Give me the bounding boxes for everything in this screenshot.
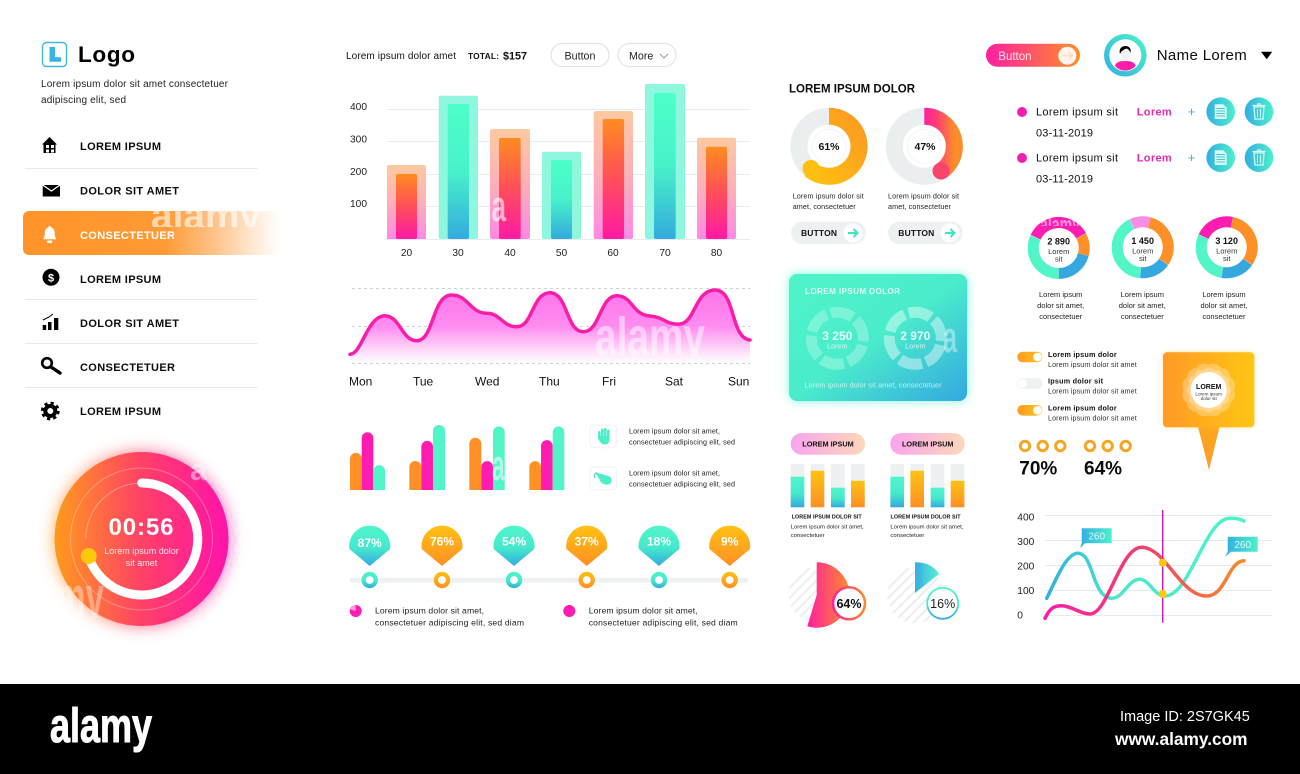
icon: trash: [1245, 143, 1273, 172]
panel: sidebar menu: CONSECTETUER: [80, 230, 175, 242]
bar chart: 80: [711, 248, 722, 259]
stat 64%: [1084, 441, 1130, 480]
panel: gradient card: Lorem ipsum dolor sit amet, consectetuer: [804, 380, 942, 390]
panel: countdown timer: sit amet: [126, 558, 158, 568]
segmented donut 1 450: Lorem: [1132, 246, 1153, 256]
segmented donut 1 450: sit: [1139, 254, 1147, 263]
donut 47%: 47%: [914, 141, 936, 153]
donut captions: consectetuer: [1039, 312, 1083, 321]
donut captions: Lorem ipsum: [1121, 290, 1164, 299]
footer bar: [0, 684, 1300, 774]
callout pin card: dolor sit: [1201, 396, 1217, 401]
progress ring: [88, 483, 198, 595]
icon: growth chart: [43, 314, 58, 330]
area chart: Wed: [475, 374, 499, 388]
donut captions: amet, consectetuer: [888, 202, 952, 211]
toggles: Lorem ipsum dolor sit amet: [1048, 386, 1137, 396]
alamy logo: alamy: [50, 700, 152, 753]
segmented donut 2 890: alamy: [1040, 212, 1080, 237]
panel: sidebar menu: DOLOR SIT AMET: [80, 186, 179, 198]
gesture legend: Lorem ipsum dolor sit amet,: [629, 426, 720, 436]
highlighted menu row: [23, 211, 280, 255]
gesture legend: consectetuer adipiscing elit, sed: [629, 438, 735, 446]
pin 76%: 76%: [430, 534, 454, 548]
segmented donut 3 120: Lorem: [1216, 246, 1237, 256]
timeline legend: consectetuer adipiscing elit, sed diam: [589, 618, 738, 628]
logo: Logo: [78, 42, 135, 67]
stat 70%: 70%: [1019, 458, 1057, 480]
button right: BUTTON: [898, 228, 934, 238]
segmented donut 2 890: 2 890: [1047, 236, 1070, 246]
flower badge: [1179, 360, 1238, 420]
ring 2 970: 2 970: [900, 329, 931, 343]
donut captions: [793, 192, 959, 211]
panel: mini bar card left: [791, 433, 865, 539]
top toolbar: Lorem ipsum dolor amet: [346, 51, 456, 62]
panel: mini bar card left: LOREM IPSUM DOLOR SIT: [792, 515, 862, 521]
toggle on: [1017, 352, 1042, 362]
pin 87%: 87%: [358, 536, 382, 550]
watermark on menu: alamy: [151, 194, 262, 238]
ring 3 250: [805, 306, 869, 370]
segmented donut 3 120: 3 120: [1215, 236, 1238, 246]
pin 18%: [638, 526, 679, 588]
donut 47%: [894, 116, 954, 180]
watermark on area chart: alamy: [595, 307, 705, 367]
timeline legend: Lorem ipsum dolor sit amet,: [589, 606, 698, 616]
row 2: Lorem ipsum sit: [1036, 152, 1118, 164]
pin 54%: 54%: [502, 534, 526, 548]
callout 260: 260: [1234, 540, 1251, 551]
callout pin card: Lorem ipsum: [1195, 392, 1222, 396]
donut captions: consectetuer: [1203, 312, 1246, 321]
bars: [387, 84, 736, 239]
watermark on timer top: a: [190, 454, 207, 487]
area chart: Tue: [413, 374, 434, 388]
panel: mini bar card left: Lorem ipsum dolor sit amet,: [791, 524, 864, 530]
segmented donut 1 450: [1107, 212, 1178, 283]
donut captions: Lorem ipsum dolor sit: [793, 192, 864, 200]
bar chart: 400: [350, 102, 367, 113]
pin 54%: [494, 526, 534, 588]
area chart: Fri: [602, 374, 616, 388]
pin 76%: [422, 526, 462, 588]
list rows: [1017, 97, 1273, 186]
donut captions: Lorem ipsum dolor sit: [888, 192, 959, 200]
ring 3 250: Lorem: [827, 342, 847, 350]
callout pin card: LOREM: [1196, 384, 1222, 391]
icon: gear: [42, 403, 58, 419]
donut 61%: 61%: [818, 141, 840, 153]
area chart: [349, 288, 750, 388]
row 1: +: [1188, 104, 1195, 119]
area chart: Thu: [539, 374, 560, 388]
segmented donut 2 890: sit: [1055, 254, 1063, 264]
panel: sidebar menu: LOREM IPSUM: [80, 406, 161, 418]
ring 2 970: Lorem: [905, 342, 925, 350]
icon: document: [1206, 143, 1235, 172]
icon: mail: [43, 185, 60, 196]
line chart: 300: [1017, 537, 1035, 548]
pin 18%: 18%: [647, 534, 671, 548]
stat 70%: [1019, 441, 1065, 480]
panel: mini bar card right: consectetuer: [890, 533, 924, 539]
pin 9%: 9%: [721, 534, 739, 548]
icon: document: [1206, 97, 1235, 126]
bar chart: 20: [401, 248, 412, 259]
panel: mini bar card left: LOREM IPSUM: [802, 440, 854, 449]
line chart: 0: [1017, 610, 1023, 622]
row 2: Lorem: [1137, 152, 1172, 164]
timeline legend: consectetuer adipiscing elit, sed diam: [375, 618, 524, 628]
line chart: 200: [1017, 562, 1035, 572]
row 1: 03-11-2019: [1036, 128, 1093, 140]
donut captions: [1037, 290, 1248, 321]
more button: [618, 44, 676, 66]
intro text: adipiscing elit, sed: [41, 95, 126, 106]
bar chart: 300: [350, 134, 367, 146]
area chart: Mon: [349, 374, 372, 388]
bar chart: 50: [556, 248, 567, 259]
bar chart: [350, 84, 750, 259]
segmented donut 2 890: [1028, 216, 1090, 279]
segmented donut 1 450: 1 450: [1131, 236, 1154, 246]
button left: BUTTON: [801, 228, 837, 238]
donut 61%: [799, 116, 859, 177]
donut captions: amet, consectetuer: [793, 202, 856, 211]
icon: pointing hand: [590, 467, 617, 490]
button right: [888, 222, 963, 244]
callout 260: [1080, 528, 1112, 548]
intro text: [41, 79, 229, 106]
pie 16%: [887, 562, 958, 623]
gesture legend: Lorem ipsum dolor sit amet,: [629, 469, 720, 478]
button: [551, 44, 609, 66]
callout 260: 260: [1088, 532, 1105, 542]
area chart: Sun: [728, 374, 749, 388]
bar chart: 40: [504, 248, 516, 259]
pin 37%: 37%: [575, 534, 599, 548]
panel: sidebar menu: LOREM IPSUM: [80, 274, 161, 286]
more button: More: [629, 50, 653, 62]
pie 64%: [789, 562, 865, 628]
icon: bell: [43, 226, 56, 243]
button left: [791, 222, 866, 244]
panel: gradient card: [789, 274, 967, 401]
segmented donut 3 120: sit: [1223, 254, 1231, 263]
panel: sidebar menu: [23, 137, 280, 419]
bar chart: 30: [452, 248, 464, 259]
row 2: 03-11-2019: [1036, 174, 1093, 186]
panel: sidebar menu: DOLOR SIT AMET: [80, 318, 179, 330]
row 1: Lorem: [1137, 106, 1172, 118]
area chart: Sat: [665, 374, 684, 388]
top toolbar: $157: [503, 50, 527, 62]
ring 3 250: 3 250: [822, 329, 853, 343]
pin 87%: [349, 526, 390, 588]
row 1: [1017, 97, 1273, 140]
panel: mini bar card left: consectetuer: [791, 533, 825, 539]
gesture legend: consectetuer adipiscing elit, sed: [629, 480, 735, 489]
footer bar: Image ID: 2S7GK45: [1120, 709, 1250, 725]
stat 64%: 64%: [1084, 458, 1122, 480]
gradient button: [986, 44, 1080, 67]
toggle off: [1017, 378, 1042, 389]
ring 2 970: [883, 306, 947, 370]
logo: [42, 42, 135, 67]
row 2: +: [1188, 150, 1195, 165]
icon: logo L: [42, 42, 66, 66]
watermark on card: a: [943, 313, 957, 362]
top toolbar: TOTAL:: [468, 51, 499, 61]
callout 260: [1225, 537, 1258, 557]
segmented donut 3 120: [1191, 212, 1262, 283]
bar chart: 60: [607, 248, 619, 259]
donut captions: Lorem ipsum: [1202, 290, 1246, 299]
timeline legend: [350, 605, 738, 628]
pin 9%: [709, 526, 750, 588]
pie 16%: 16%: [930, 597, 955, 611]
bar chart: 70: [659, 248, 671, 259]
icon: trash: [1245, 97, 1273, 126]
icon: search: [42, 358, 60, 373]
icon: dollar: $: [48, 272, 54, 284]
donut captions: dolor sit amet,: [1037, 301, 1084, 310]
icon: hand: [590, 425, 617, 448]
button: Button: [565, 50, 596, 62]
bar chart: 200: [350, 167, 367, 178]
toggles: Lorem ipsum dolor: [1048, 403, 1117, 412]
panel: mini bar card right: LOREM IPSUM DOLOR SIT: [890, 515, 961, 521]
line chart: 400: [1017, 512, 1035, 524]
watermark on grouped bars: a: [492, 441, 505, 490]
percent pin timeline: [349, 526, 750, 588]
row 2: [1017, 143, 1273, 186]
callout pin card: [1163, 352, 1254, 470]
panel: sidebar menu: CONSECTETUER: [80, 362, 175, 374]
watermark on timer: my: [56, 565, 104, 630]
icon: avatar: [1104, 34, 1147, 77]
icon: home: [42, 137, 57, 153]
toggles: Lorem ipsum dolor sit amet: [1048, 413, 1137, 422]
donut captions: Lorem ipsum: [1039, 290, 1082, 299]
top toolbar: [346, 44, 676, 66]
panel: gradient card: LOREM IPSUM DOLOR: [805, 287, 900, 296]
donut captions: dolor sit amet,: [1119, 301, 1166, 310]
bar chart: 100: [350, 199, 367, 210]
line chart: 100: [1017, 586, 1035, 597]
toggle on: [1017, 405, 1042, 416]
user profile: Name Lorem: [1157, 47, 1247, 64]
donut captions: dolor sit amet,: [1200, 301, 1248, 310]
toggles: [1017, 350, 1137, 422]
timeline legend: Lorem ipsum dolor sit amet,: [375, 606, 484, 616]
panel: mini bar card right: Lorem ipsum dolor sit amet,: [890, 524, 964, 530]
pin 37%: [566, 526, 607, 588]
toggles: Lorem ipsum dolor: [1048, 350, 1117, 359]
panel: countdown timer: Lorem ipsum dolor: [104, 546, 179, 556]
panel: mini bar card right: LOREM IPSUM: [902, 440, 953, 449]
icon: dropdown arrow: [1261, 52, 1272, 59]
watermark on bar: a: [492, 182, 506, 231]
segmented donut 2 890: Lorem: [1048, 247, 1069, 256]
panel: countdown timer: [54, 452, 228, 626]
panel: countdown timer: 00:56: [108, 514, 174, 541]
line chart: [1017, 510, 1273, 623]
gradient button: Button: [998, 51, 1032, 63]
grouped bars: [350, 425, 564, 490]
icon: dollar: [42, 269, 60, 286]
pie 64%: 64%: [836, 597, 862, 611]
heading: lorem ipsum dolor: LOREM IPSUM DOLOR: [789, 84, 916, 96]
panel: sidebar menu: LOREM IPSUM: [80, 141, 161, 153]
intro text: Lorem ipsum dolor sit amet consectetuer: [41, 79, 229, 90]
row 1: Lorem ipsum sit: [1036, 106, 1118, 118]
panel: mini bar card right: [890, 433, 965, 539]
footer bar: www.alamy.com: [1114, 729, 1248, 749]
toggles: Lorem ipsum dolor sit amet: [1048, 360, 1137, 369]
donut captions: consectetuer: [1121, 312, 1164, 321]
toggles: Ipsum dolor sit: [1048, 376, 1104, 386]
user profile: [1104, 34, 1272, 77]
gesture legend: [590, 425, 735, 490]
